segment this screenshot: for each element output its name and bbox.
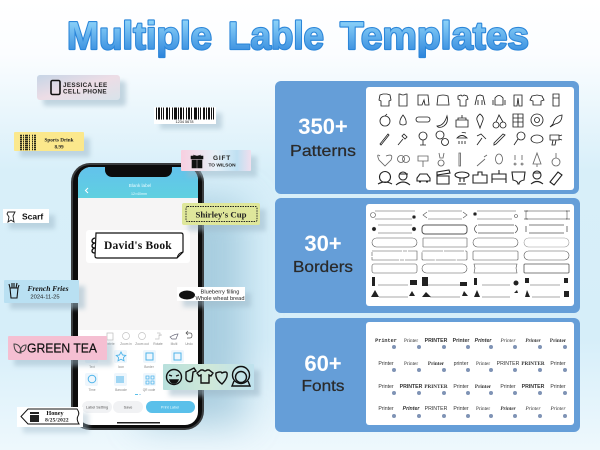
font sample grid: Printer — [500, 338, 516, 344]
label: Jessica Lee: JESSICA LEE — [63, 82, 108, 89]
font sample grid: PRINTER — [400, 384, 423, 390]
label: green tea — [8, 336, 113, 366]
font sample grid: Printer — [550, 406, 566, 412]
font sample grid: Printer — [403, 406, 420, 412]
title: Templates — [340, 15, 529, 58]
icon: QR code — [20, 136, 37, 150]
label: blueberry: Whole wheat bread — [195, 296, 245, 302]
stat: 30+ Borders: Borders — [293, 259, 353, 276]
font sample grid: Printer — [428, 361, 445, 367]
label: Shirley's Cup: Shirley's Cup — [195, 210, 247, 220]
toolbar: Delete — [105, 342, 115, 346]
function tiles: Time — [89, 388, 96, 392]
font sample grid: Printer — [378, 361, 394, 367]
panel: fonts — [275, 318, 580, 432]
toolbar: Undo — [185, 342, 193, 346]
font sample grid: Printer — [375, 338, 397, 344]
stat: 350+ Patterns: Patterns — [290, 143, 356, 160]
border template grid — [370, 211, 570, 297]
font sample grid: Printer — [524, 406, 541, 412]
function tiles: Border — [144, 365, 155, 369]
label: sports drink: Sports Drink — [45, 138, 74, 144]
label: blueberry: Blueberry filling — [201, 290, 239, 296]
stat: 350+ Patterns: 350+ — [298, 114, 348, 139]
font sample grid: Printer — [378, 384, 394, 390]
stat: 30+ Borders — [293, 231, 353, 276]
font sample grid: Printer — [500, 406, 517, 412]
label: French Fries: French Fries — [27, 284, 69, 293]
font sample grid: Printer — [475, 338, 492, 344]
font sample grid: Printer — [404, 338, 418, 344]
font sample grid: Printer — [378, 406, 394, 412]
label: blueberry — [177, 287, 251, 307]
app header: 12×40mm — [131, 192, 147, 196]
font sample grid: Printer — [453, 406, 469, 412]
icon: leaves — [14, 344, 26, 353]
font sample grid: Printer — [550, 338, 567, 344]
icon: honey jar — [30, 412, 39, 422]
label: scarf: Scarf — [22, 212, 43, 222]
function tiles: Barcode — [115, 388, 127, 392]
font sample grid: Printer — [500, 384, 516, 390]
label: gift: GIFT — [213, 155, 231, 162]
font sample grid: Printer — [550, 384, 566, 390]
title: Lable — [228, 15, 324, 58]
app header — [78, 167, 198, 198]
action buttons — [82, 401, 195, 424]
label: barcode: 1234 5678 — [176, 120, 193, 124]
label: gift — [181, 150, 257, 177]
app header: Blank label — [129, 183, 151, 188]
toolbar: Rotate — [153, 342, 163, 346]
font sample grid: Printer — [475, 384, 492, 390]
toolbar: Multi — [171, 342, 178, 346]
action buttons: Save — [124, 406, 132, 410]
font sample grid — [375, 338, 567, 418]
action buttons: Print Label — [161, 406, 179, 410]
font sample grid: Printer — [550, 361, 566, 367]
label: gift: TO WILSON — [208, 162, 236, 168]
font sample grid: Printer — [476, 406, 490, 412]
icon: bread — [179, 290, 195, 300]
stat: 30+ Borders: 30+ — [304, 231, 342, 256]
stat: 350+ Patterns — [290, 114, 356, 160]
label: honey — [17, 407, 89, 433]
font sample grid: PRINTER — [522, 384, 545, 390]
label: green tea: GREEN TEA — [27, 340, 97, 356]
label: honey: 8/25/2022 — [45, 418, 69, 424]
font sample grid: PRINTER — [425, 338, 448, 344]
title — [67, 15, 529, 58]
toolbar: Zoom out — [135, 342, 149, 346]
function tiles — [78, 347, 198, 399]
label: barcode — [154, 107, 222, 129]
font sample grid: Printer — [404, 361, 418, 367]
label preview: David's Book: David's Book — [104, 240, 172, 252]
label: sports drink: 8.99 — [54, 144, 64, 150]
stat: 60+ Fonts — [302, 351, 344, 395]
label: Shirley's Cup — [182, 203, 266, 231]
function tiles: Icon — [118, 365, 124, 369]
font sample grid: PRINTER — [497, 361, 520, 367]
font sample grid: printer — [454, 361, 469, 367]
phone mockup — [71, 163, 204, 430]
toolbar: Zoom in — [120, 342, 132, 346]
action buttons: Label Setting — [86, 406, 108, 410]
font sample grid: PRINTER — [425, 406, 448, 412]
label: French Fries: 2024-11-25 — [30, 294, 60, 300]
panel: patterns — [275, 81, 579, 194]
icon: gift box — [191, 155, 203, 168]
toolbar — [104, 331, 198, 347]
panel: borders — [275, 198, 580, 313]
function tiles: Text — [89, 365, 95, 369]
pattern icon grid — [378, 94, 562, 185]
stat: 60+ Fonts: Fonts — [302, 378, 344, 395]
stat: 60+ Fonts: 60+ — [304, 351, 342, 376]
label preview: David's Book — [86, 230, 190, 263]
font sample grid: Printer — [476, 361, 490, 367]
label: French Fries — [4, 280, 85, 309]
label: honey: Honey — [46, 410, 64, 417]
font sample grid: Printer — [453, 384, 469, 390]
font sample grid: PRINTER — [424, 384, 448, 390]
label: scarf — [3, 209, 55, 229]
function tiles: QR code — [143, 388, 156, 392]
title: Multiple — [67, 15, 212, 58]
label: sports drink — [14, 132, 90, 157]
font sample grid: PRINTER — [521, 361, 545, 367]
label: emoji icons — [163, 364, 260, 396]
label: Jessica Lee — [37, 75, 126, 106]
label: Jessica Lee: CELL PHONE — [63, 88, 107, 96]
font sample grid: Printer — [453, 338, 469, 344]
icon: fries — [9, 283, 19, 298]
font sample grid: Printer — [525, 338, 542, 344]
